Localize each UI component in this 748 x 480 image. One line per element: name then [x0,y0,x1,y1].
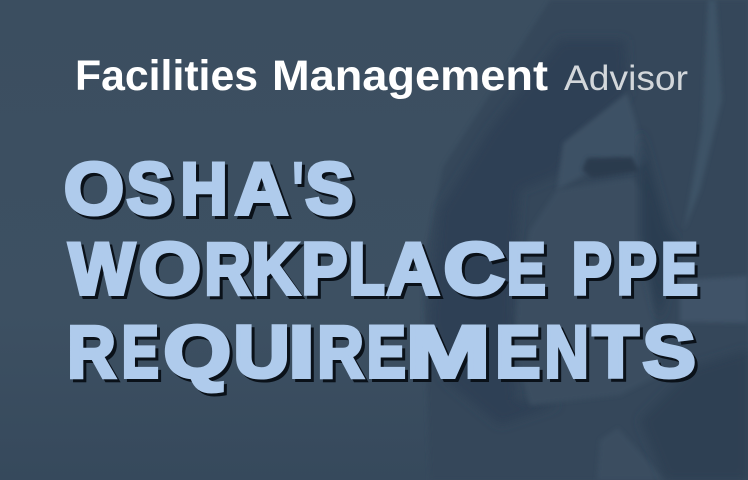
title line 2: A [387,229,440,310]
title line 1: O [64,149,124,230]
title line 2: E [507,229,546,310]
title line 3: R [67,312,116,393]
background photo: worker holding hard hat [423,0,748,480]
title line 2: C [444,229,505,310]
logo: Facilities Management Advisor: Advisor [564,59,688,98]
title line 2: O [139,229,201,310]
title line 1: H [180,149,228,230]
title line 2: L [349,229,385,310]
title line 2: P [572,229,612,310]
title line 2: E [661,229,698,310]
logo: Facilities Management Advisor: Facilities [75,52,258,100]
logo: Facilities Management Advisor [75,52,688,100]
title line 1: S [126,149,172,230]
title line 3: S [643,312,696,393]
title line 1: A [235,149,288,230]
title line 3: U [234,312,290,393]
title [64,149,698,393]
title line 3: R [317,312,364,393]
title line 3: E [367,312,406,393]
title line 3: N [545,312,589,393]
title line 2: P [301,229,347,310]
title line 2: K [251,229,299,310]
title line 3: T [593,312,639,393]
title line 1: S [305,149,353,230]
logo: Facilities Management Advisor: Management [272,52,548,100]
title line 2: R [204,229,251,310]
title line 2: P [617,229,657,310]
title line 1: ' [293,149,303,230]
title line 3: I [288,312,314,393]
title line 3: M [406,312,490,393]
title line 3: E [495,312,540,393]
title line 3: E [122,312,159,393]
title line 3: Q [164,312,231,393]
title line 2: W [69,229,135,310]
